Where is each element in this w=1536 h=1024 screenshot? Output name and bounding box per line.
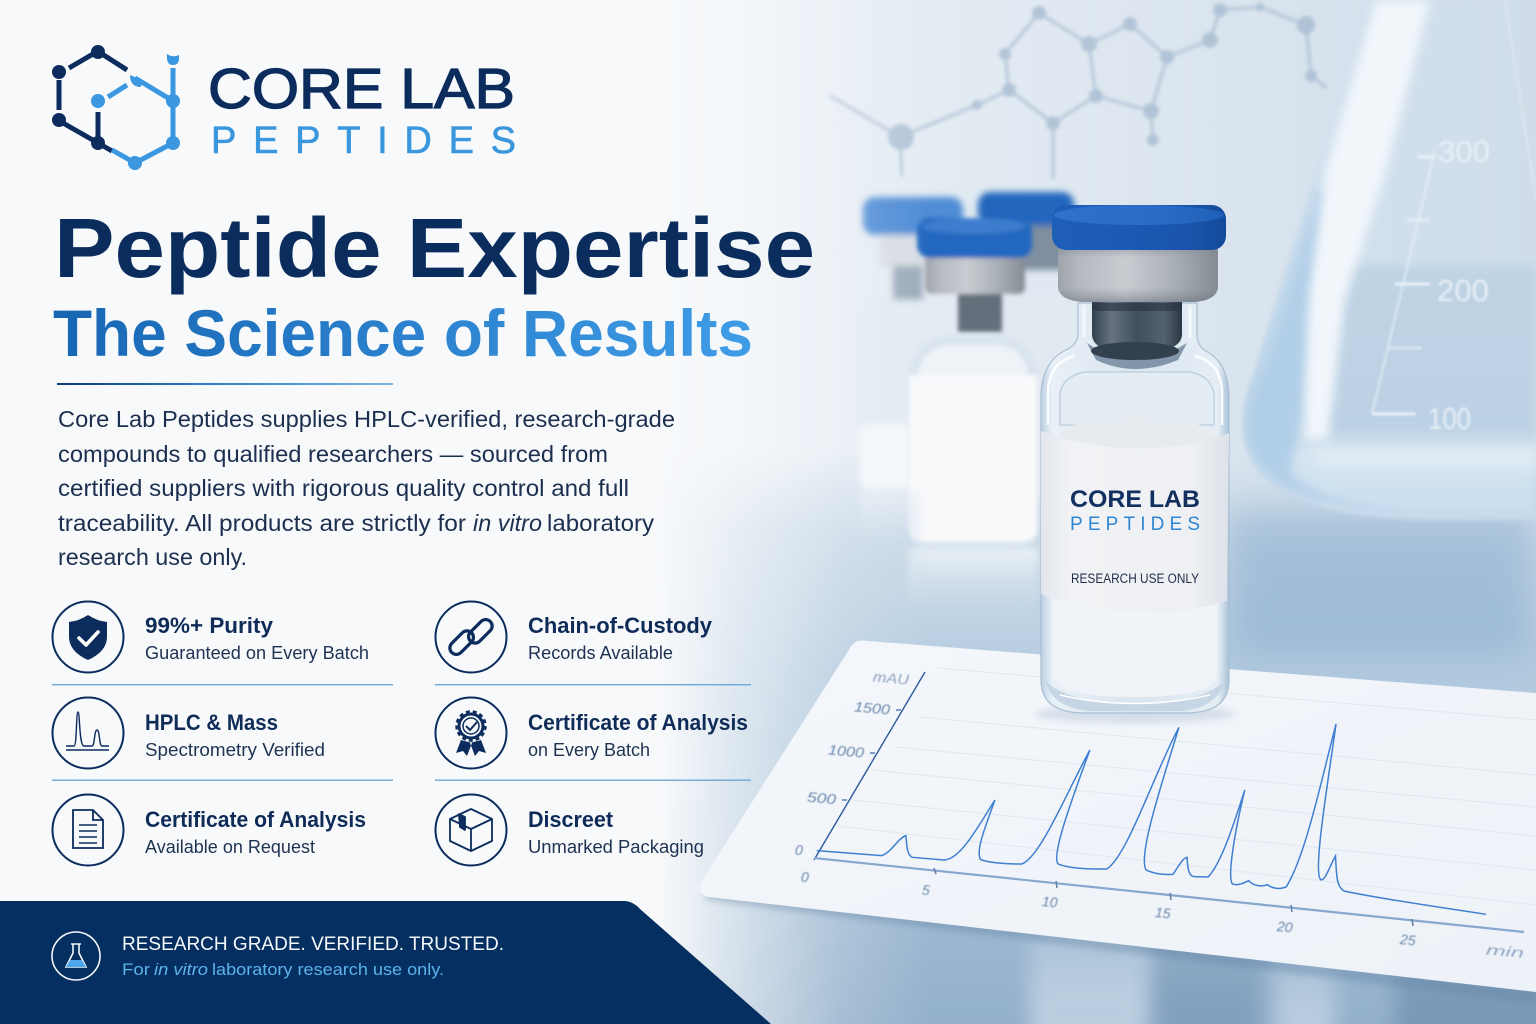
faint grid lines [838, 668, 1536, 905]
chart axis labels: 1000 [827, 741, 865, 761]
flask graduation marks: 200 [1437, 273, 1489, 308]
icon: award ribbon [436, 698, 506, 768]
logo wordmark: PEPTIDES [211, 120, 516, 162]
feature: 99%+ purity: Guaranteed on Every Batch [145, 642, 369, 663]
label text: CORE LAB [1070, 486, 1200, 513]
chart axis labels: min [1485, 941, 1525, 961]
chart axis labels: 0 [794, 842, 804, 858]
silver crimp [1058, 248, 1218, 302]
background: laboratory photo scene [640, 0, 1536, 1024]
blurred background vials [858, 192, 1078, 643]
chromatogram peak trace [817, 724, 1486, 914]
chart axis labels: 25 [1398, 931, 1416, 948]
label text: PEPTIDES [1070, 514, 1200, 535]
intro paragraph: traceability. All products are strictly for [58, 510, 466, 536]
chart axis labels: 500 [806, 789, 837, 807]
feature: discreet packaging: Unmarked Packaging [528, 836, 704, 857]
feature: certificate of analysis on every batch: Certificate of Analysis [528, 710, 748, 735]
glass body [1041, 303, 1229, 713]
erlenmeyer flask [1243, 0, 1536, 519]
feature: chain of custody [436, 602, 713, 672]
flask graduation marks [1372, 0, 1536, 436]
decorative molecule structure [829, 3, 1327, 179]
flask graduation marks: 300 [1438, 134, 1490, 169]
feature: HPLC and mass spectrometry: HPLC & Mass [145, 710, 278, 735]
glass base [1045, 680, 1225, 711]
chart axis labels [794, 668, 1525, 961]
rubber stopper [1092, 302, 1182, 350]
feature: 99%+ purity [52, 602, 369, 672]
feature: discreet packaging [436, 794, 704, 866]
chart axis labels: mAU [872, 668, 911, 688]
chromatogram axes [814, 672, 1524, 932]
feature: chain of custody: Records Available [528, 642, 673, 663]
feature: certificate of analysis on request: Available on Request [145, 836, 315, 857]
intro paragraph: compounds to qualified researchers — sourced from [58, 441, 608, 467]
feature: discreet packaging: Discreet [528, 807, 614, 832]
feature: certificate of analysis on every batch: on Every Batch [528, 739, 650, 760]
bottom banner [0, 901, 771, 1024]
blue cap [1052, 205, 1226, 250]
intro paragraph: certified suppliers with rigorous quality control and full [58, 475, 629, 501]
banner text: For [122, 960, 150, 979]
far left vial [858, 197, 963, 490]
label text [1070, 486, 1200, 586]
banner text: RESEARCH GRADE. VERIFIED. TRUSTED. [122, 934, 504, 955]
chart axis labels: 20 [1275, 918, 1293, 935]
chart axis labels: 0 [800, 869, 810, 885]
heading divider [57, 383, 393, 385]
logo wordmark [208, 57, 516, 162]
feature dividers [52, 684, 751, 781]
title: Peptide Expertise [54, 201, 815, 295]
logo wordmark: CORE LAB [208, 57, 515, 121]
powder bottom [1053, 600, 1217, 697]
flask graduation marks: 100 [1428, 401, 1471, 436]
icon: chain link [436, 602, 506, 672]
feature: 99%+ purity: 99%+ Purity [145, 613, 274, 638]
chromatogram paper [700, 640, 1536, 1004]
powder top [1058, 417, 1218, 460]
chart axis labels: 10 [1041, 893, 1058, 910]
intro paragraph: research use only. [58, 544, 247, 570]
logo: hexagon mark [52, 45, 180, 170]
label [1041, 431, 1229, 613]
chart axis labels: 5 [921, 882, 931, 898]
feature: certificate of analysis on request [52, 794, 366, 866]
intro paragraph [58, 406, 675, 570]
feature: HPLC and mass spectrometry [52, 698, 325, 768]
intro paragraph: in vitro [473, 510, 542, 536]
feature: certificate of analysis on every batch [436, 698, 748, 768]
feature: chain of custody: Chain-of-Custody [528, 613, 713, 638]
icon: flask badge [52, 932, 100, 980]
subtitle: The Science of Results [53, 296, 753, 370]
icon: chromatogram [52, 698, 124, 768]
banner text: laboratory research use only. [212, 960, 444, 979]
icon: box [436, 794, 506, 866]
icon: shield check [52, 602, 124, 672]
left side white fade [0, 0, 1000, 1024]
icon: document [52, 794, 124, 866]
feature: certificate of analysis on request: Certificate of Analysis [145, 807, 366, 832]
intro paragraph: Core Lab Peptides supplies HPLC-verified, research-grade [58, 406, 675, 432]
middle vial [908, 218, 1038, 548]
feature: HPLC and mass spectrometry: Spectrometry Verified [145, 739, 325, 760]
chart axis labels: 15 [1154, 904, 1171, 921]
intro paragraph: laboratory [547, 510, 655, 536]
label text: RESEARCH USE ONLY [1071, 571, 1199, 586]
table reflection of vials [908, 548, 1038, 643]
far right vial [978, 192, 1078, 500]
foreground vial [1035, 205, 1235, 723]
chart axis labels: 1500 [853, 698, 891, 718]
banner text [122, 934, 504, 979]
banner text: in vitro [154, 960, 208, 979]
